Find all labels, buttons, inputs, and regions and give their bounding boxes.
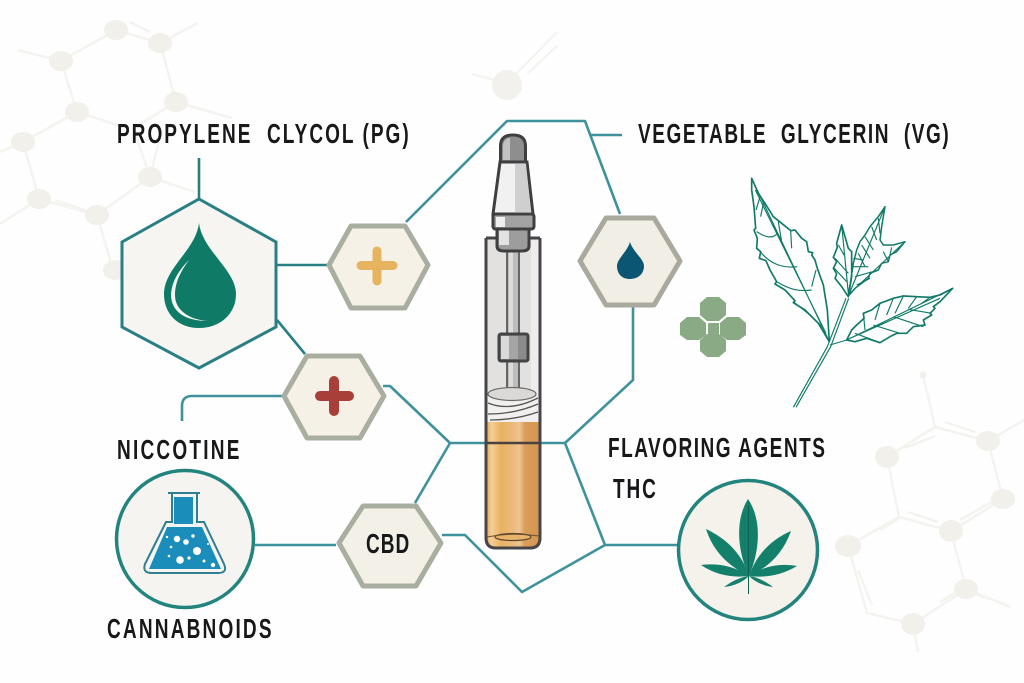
icon: cannabis leaf — [701, 499, 797, 594]
hexagon: CBD — [339, 506, 441, 586]
connector lines — [182, 121, 678, 592]
icon: green octagon cluster — [680, 297, 746, 357]
glass tube — [486, 238, 540, 548]
icon: flask — [144, 493, 225, 573]
cartridge — [486, 135, 540, 548]
hexagon: red plus — [284, 356, 384, 438]
label: flavoring agents: FLAVORING AGENTS — [608, 432, 825, 464]
icon: herb leaves — [752, 178, 953, 407]
background molecule: top left — [0, 20, 232, 280]
middle leaf cluster — [833, 225, 852, 297]
tube outline — [486, 238, 540, 548]
big left leaf — [752, 178, 829, 342]
label: propylene glycol: PROPYLENE CLYCOL (PG) — [117, 118, 409, 150]
icon: green droplet — [164, 223, 236, 328]
hexagon: CBD: CBD — [366, 528, 410, 560]
liquid — [486, 422, 540, 548]
central stem — [507, 250, 519, 390]
right leaf — [847, 288, 953, 343]
hexagon: propylene glycol — [122, 199, 276, 368]
background molecule: bottom right — [835, 372, 1024, 652]
label: THC: THC — [613, 473, 656, 505]
upper collar — [493, 214, 534, 229]
circle: flask icon — [116, 470, 254, 608]
mouthpiece — [493, 162, 533, 214]
background molecule: top centre — [472, 32, 558, 100]
label: vegetable glycerin: VEGETABLE GLYCERIN (VG) — [638, 118, 949, 150]
hexagon: blue droplet — [580, 218, 680, 305]
circle: cannabis leaf icon — [678, 480, 818, 620]
tip — [500, 135, 526, 162]
label: nicotine: NICCOTINE — [117, 434, 239, 466]
label: cannabinoids: CANNABNOIDS — [107, 613, 272, 645]
metal block — [499, 334, 528, 361]
hexagon: yellow plus — [329, 226, 428, 308]
lower collar — [497, 228, 529, 251]
coil — [487, 388, 538, 422]
fill level line — [486, 442, 540, 444]
